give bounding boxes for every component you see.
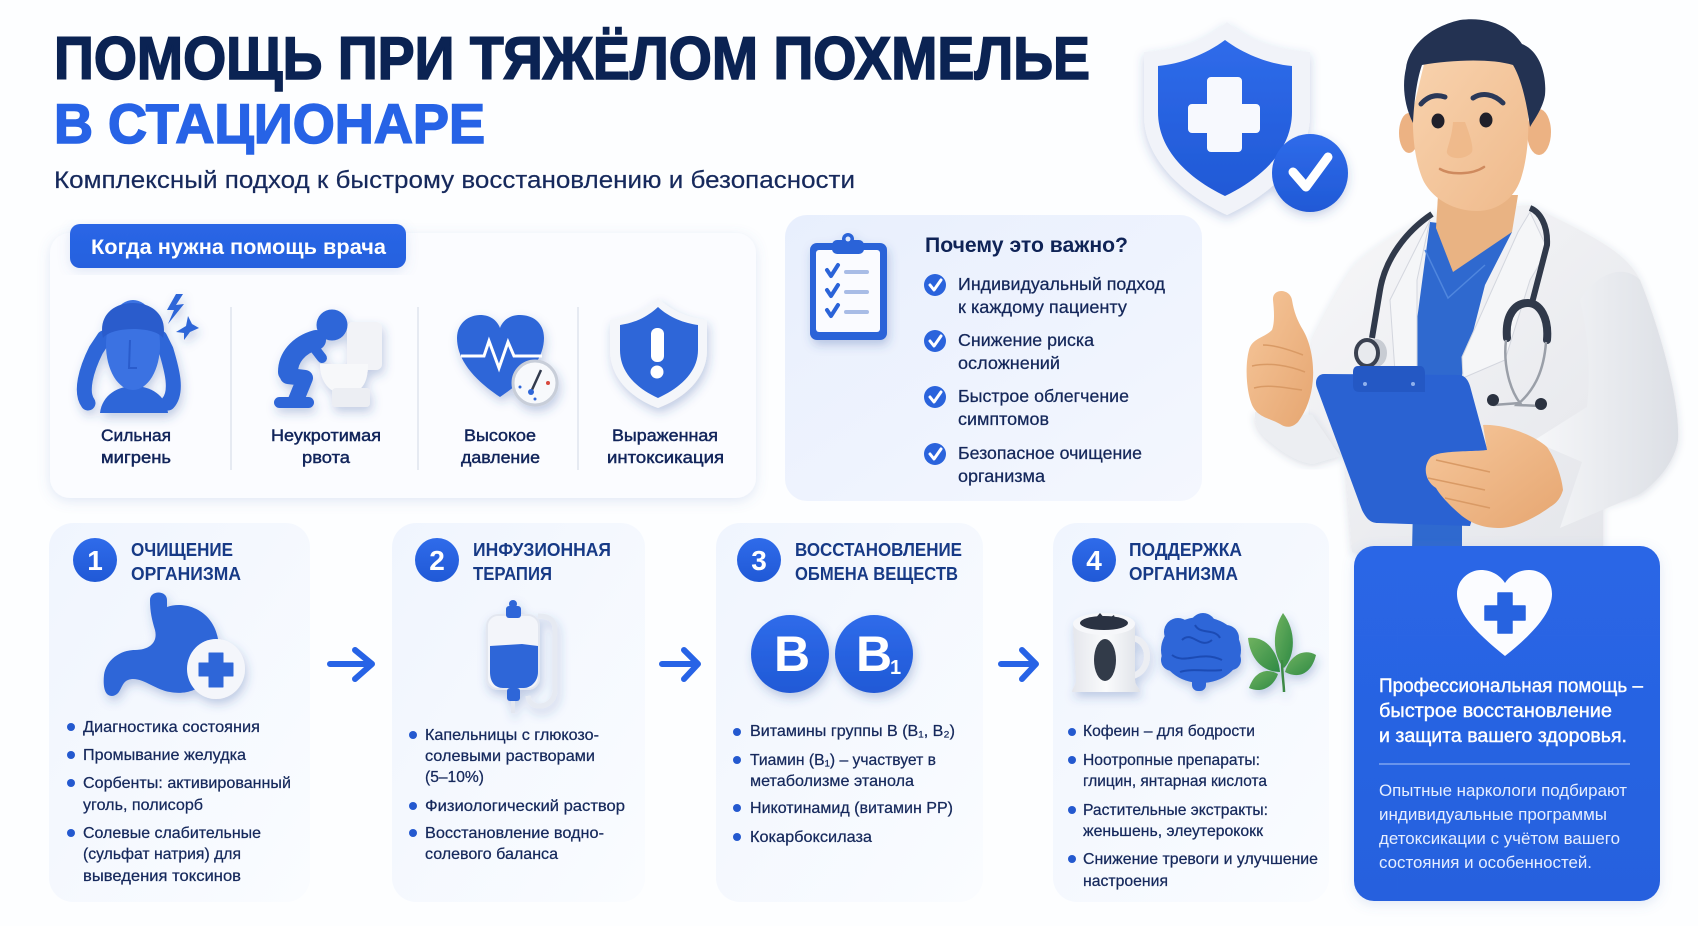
icon: vitamin B1: 1 (890, 657, 901, 679)
title: ПОМОЩЬ ПРИ ТЯЖЁЛОМ ПОХМЕЛЬЕ (54, 25, 1090, 92)
doctor hair (1404, 19, 1545, 127)
doctor eyebrows (1421, 95, 1503, 104)
step 3 list: Никотинамид (витамин РР) (750, 800, 953, 817)
symptom labels: интоксикация (607, 448, 724, 467)
checklist: симптомов (958, 409, 1049, 429)
icon: herb leaves (1248, 613, 1316, 692)
icon: white heart with cross (1457, 570, 1552, 656)
icon: intoxication warning shield (610, 298, 707, 408)
callout headline: и защита вашего здоровья. (1379, 726, 1627, 747)
step 4 heading: ОРГАНИЗМА (1129, 564, 1238, 584)
step 2 list (409, 727, 625, 863)
icon: vomiting (274, 310, 382, 408)
doctor right sleeve (1533, 272, 1678, 528)
step 2 list: солевыми растворами (425, 748, 595, 765)
step 1 list (67, 719, 291, 885)
checklist: Снижение риска (958, 330, 1094, 350)
panel: step 1 (49, 523, 310, 902)
step 4 list: настроения (1083, 873, 1168, 890)
checklist: Индивидуальный подход (958, 274, 1165, 294)
step 4 list: Растительные экстракты: (1083, 802, 1268, 819)
symptom labels: Выраженная (612, 426, 718, 445)
checklist: Быстрое облегчение (958, 386, 1129, 406)
heading badge: Когда нужна помощь врача (91, 236, 386, 259)
step 1 heading: ОЧИЩЕНИЕ (131, 540, 233, 560)
icon: vitamin B1: B (856, 626, 892, 682)
callout body text: детоксикации с учётом вашего (1379, 830, 1620, 848)
checklist: Безопасное очищение (958, 443, 1142, 463)
doctor neck (1436, 195, 1518, 272)
doctor stethoscope (1356, 208, 1547, 410)
arrow: step 3 to 4 (1001, 650, 1036, 679)
doctor left sleeve (1255, 412, 1340, 464)
why heading: Почему это важно? (925, 234, 1128, 257)
doctor face (1413, 60, 1528, 211)
checklist: к каждому пациенту (958, 297, 1127, 317)
panel: step 3 (716, 523, 983, 902)
callout headline: Профессиональная помощь – (1379, 676, 1643, 697)
icon: vitamin B1 (835, 615, 913, 693)
step 3 list: метаболизме этанола (750, 773, 914, 790)
icon: vitamin B: B (774, 626, 810, 682)
step 1 number: 1 (87, 545, 103, 576)
doctor clipboard (1316, 374, 1490, 526)
icon: stomach (104, 592, 245, 699)
doctor illustration (1247, 19, 1678, 552)
step 2 list: (5–10%) (425, 769, 484, 786)
step 3 heading: ОБМЕНА ВЕЩЕСТВ (795, 564, 958, 584)
callout headline (1379, 676, 1643, 747)
icon: coffee mug (1072, 613, 1147, 692)
step 4 number: 4 (1086, 545, 1102, 576)
step 3 number: 3 (751, 545, 767, 576)
symptom labels: Высокое (464, 426, 536, 445)
step 3 heading (795, 540, 962, 584)
step 4 list: Ноотропные препараты: (1083, 752, 1260, 769)
step 2 number: 2 (429, 545, 445, 576)
callout body text: Опытные наркологи подбирают (1379, 782, 1627, 800)
step 1 list: Диагностика состояния (83, 719, 260, 736)
step 3 list: Витамины группы В (В₁, В₂) (750, 723, 955, 740)
symptom labels: мигрень (101, 448, 171, 467)
callout body text (1379, 782, 1627, 872)
step 2 list: Восстановление водно- (425, 825, 604, 842)
doctor scrubs (1412, 222, 1512, 552)
step 2 heading: ТЕРАПИЯ (473, 564, 552, 584)
step 2 list: солевого баланса (425, 846, 558, 863)
step 1 list: уголь, полисорб (83, 797, 203, 814)
doctor eyes (1432, 112, 1492, 128)
doctor nose (1447, 122, 1472, 158)
icon: vitamin B (751, 615, 829, 693)
symptom labels: рвота (302, 448, 351, 467)
symptom labels: давление (461, 448, 540, 467)
doctor lapels (1390, 212, 1548, 378)
step 2 heading: ИНФУЗИОННАЯ (473, 540, 611, 560)
arrow: step 2 to 3 (662, 650, 698, 679)
step 1 number (73, 538, 117, 582)
panel: step 2 (392, 523, 645, 902)
step 3 number (737, 538, 781, 582)
step 2 number (415, 538, 459, 582)
callout headline: быстрое восстановление (1379, 701, 1612, 722)
doctor mouth (1440, 167, 1484, 173)
step 1 heading (131, 540, 241, 584)
panel: when medical help is needed (50, 224, 756, 498)
step 4 list: Снижение тревоги и улучшение (1083, 851, 1318, 868)
arrow: step 1 to 2 (330, 650, 372, 679)
step 1 list: (сульфат натрия) для (83, 846, 241, 863)
callout body text: индивидуальные программы (1379, 806, 1607, 824)
doctor ears (1399, 113, 1419, 153)
step 4 list (1068, 723, 1318, 890)
title: В СТАЦИОНАРЕ (54, 92, 485, 155)
doctor thumbs up hand (1247, 291, 1313, 427)
step 1 list: Сорбенты: активированный (83, 775, 291, 792)
subtitle: Комплексный подход к быстрому восстановлению и безопасности (54, 167, 855, 194)
symptom labels: Неукротимая (271, 426, 381, 445)
step 3 list: Тиамин (В₁) – участвует в (750, 752, 936, 769)
step 1 list: выведения токсинов (83, 868, 241, 885)
step 4 list: женьшень, элеутерококк (1083, 823, 1264, 840)
panel: why it matters (785, 215, 1202, 501)
doctor holding hand (1426, 425, 1563, 528)
step 4 number (1072, 538, 1116, 582)
icon: shield with cross and check (1144, 22, 1348, 215)
step 4 list: глицин, янтарная кислота (1083, 773, 1267, 790)
doctor coat (1310, 205, 1678, 552)
step 1 list: Солевые слабительные (83, 825, 261, 842)
step 2 list: Физиологический раствор (425, 798, 625, 815)
step 3 heading: ВОССТАНОВЛЕНИЕ (795, 540, 962, 560)
callout body text: состояния и особенностей. (1379, 854, 1592, 872)
step 4 heading (1129, 540, 1242, 584)
panel: professional help callout (1354, 546, 1660, 901)
icon: clipboard checklist (810, 233, 887, 340)
icon: IV bag (487, 600, 555, 713)
step 1 heading: ОРГАНИЗМА (131, 564, 241, 584)
symptom labels (101, 426, 724, 467)
step 2 list: Капельницы с глюкозо- (425, 727, 599, 744)
icon: brain (1161, 613, 1241, 691)
step 3 list (733, 723, 955, 846)
panel: step 4 (1053, 523, 1329, 902)
symptom labels: Сильная (101, 426, 171, 445)
step 4 list: Кофеин – для бодрости (1083, 723, 1255, 740)
step 2 heading (473, 540, 611, 584)
checklist: осложнений (958, 353, 1060, 373)
icon: migraine (84, 294, 199, 413)
icon: high blood pressure heart (457, 315, 557, 405)
title (54, 25, 1090, 155)
checklist: организма (958, 466, 1045, 486)
heading badge (70, 224, 406, 268)
step 4 heading: ПОДДЕРЖКА (1129, 540, 1242, 560)
step 3 list: Кокарбоксилаза (750, 829, 872, 846)
checklist (924, 274, 1165, 486)
step 1 list: Промывание желудка (83, 747, 246, 764)
